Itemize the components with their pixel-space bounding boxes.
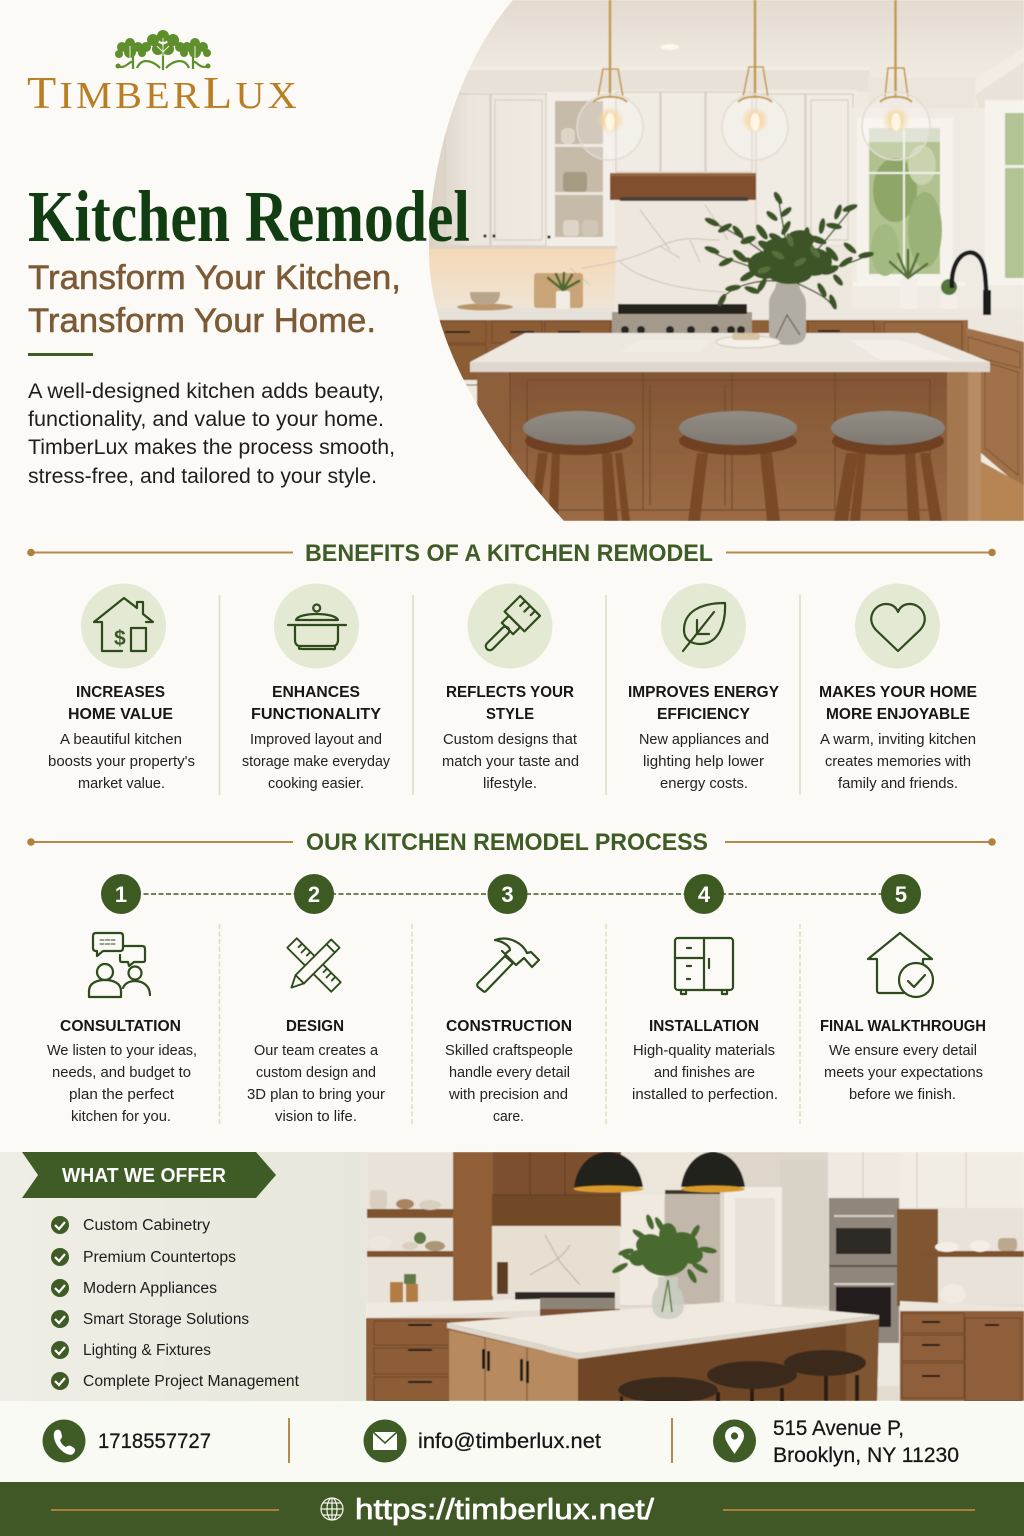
benefit text <box>628 684 779 792</box>
offer list <box>51 1216 300 1390</box>
process dividers <box>220 924 800 1125</box>
contact: email: info@timberlux.net <box>418 1430 601 1453</box>
step text: meets your expectations <box>824 1065 983 1081</box>
benefit text: creates memories with <box>825 754 971 770</box>
step: final walkthrough <box>820 933 986 1103</box>
stove <box>515 1292 615 1300</box>
contact bar <box>0 1401 1024 1482</box>
heading: process: OUR KITCHEN REMODEL PROCESS <box>306 829 708 856</box>
vase and plate <box>769 283 806 345</box>
benefit text: Improved layout and <box>250 732 382 748</box>
offer list: Modern Appliances <box>83 1280 217 1297</box>
panel: what we offer <box>0 1152 366 1401</box>
step text: FINAL WALKTHROUGH <box>820 1018 986 1035</box>
intro paragraph: TimberLux makes the process smooth, <box>28 436 395 459</box>
benefit text: storage make everyday <box>242 754 391 770</box>
step text: DESIGN <box>286 1018 344 1035</box>
benefit text <box>442 684 579 792</box>
process timeline: 5 <box>895 882 907 907</box>
contact: phone <box>42 1420 211 1462</box>
benefit text: market value. <box>78 776 165 792</box>
contact: address <box>713 1417 959 1467</box>
benefit: improves energy efficiency <box>628 584 779 792</box>
process timeline <box>101 874 921 914</box>
benefit text: MAKES YOUR HOME <box>819 684 977 701</box>
step text: needs, and budget to <box>52 1065 191 1081</box>
step text: High-quality materials <box>633 1043 775 1059</box>
black dome pendants <box>574 1152 745 1192</box>
ovens and tall cabinets <box>828 1152 900 1199</box>
step: design <box>247 938 385 1125</box>
banner heading <box>22 1152 276 1198</box>
icon: hammer <box>477 939 539 992</box>
step text: installed to perfection. <box>632 1087 778 1103</box>
left shelves <box>367 1209 464 1218</box>
contact: address: Brooklyn, NY 11230 <box>773 1444 959 1467</box>
logo wordmark: TIMBERLUX <box>27 68 300 118</box>
step text <box>632 1018 778 1103</box>
benefit text: ENHANCES <box>272 684 360 701</box>
island <box>578 1318 879 1401</box>
icon: leaf <box>661 584 746 668</box>
island <box>510 371 948 521</box>
step text <box>47 1018 197 1125</box>
step: installation <box>632 938 778 1103</box>
intro paragraph: functionality, and value to your home. <box>28 408 384 431</box>
logo: TimberLux <box>27 30 300 118</box>
process timeline: 3 <box>501 882 514 907</box>
offer list: Smart Storage Solutions <box>83 1311 249 1328</box>
website url: https://timberlux.net/ <box>355 1494 655 1526</box>
stools <box>620 1375 859 1402</box>
step text: handle every detail <box>449 1065 570 1081</box>
benefit text: energy costs. <box>660 776 748 792</box>
benefit text: A warm, inviting kitchen <box>820 732 976 748</box>
contact: email <box>364 1420 601 1462</box>
step: construction <box>445 939 573 1125</box>
contact: address: 515 Avenue P, <box>773 1417 904 1440</box>
step text: We listen to your ideas, <box>47 1043 197 1059</box>
step: consultation <box>47 933 197 1125</box>
offer list: Custom Cabinetry <box>83 1217 210 1234</box>
sill plants <box>900 278 918 309</box>
benefit text: FUNCTIONALITY <box>251 706 381 723</box>
step text: CONSULTATION <box>60 1018 181 1035</box>
subtitle <box>28 259 401 340</box>
divider <box>671 1418 673 1463</box>
step text: Our team creates a <box>254 1043 379 1059</box>
intro paragraph <box>28 380 395 488</box>
icon: globe <box>321 1498 343 1520</box>
step text <box>445 1018 573 1125</box>
benefit text: STYLE <box>486 706 534 723</box>
hood and wood column <box>492 1152 622 1228</box>
banner heading: WHAT WE OFFER <box>62 1165 227 1187</box>
step text: CONSTRUCTION <box>446 1018 572 1035</box>
heading: benefits: BENEFITS OF A KITCHEN REMODEL <box>305 540 713 567</box>
step text: INSTALLATION <box>649 1018 759 1035</box>
vase and leaves <box>652 1277 684 1319</box>
icon: house with dollar: $ <box>114 627 126 650</box>
step text: with precision and <box>448 1087 568 1103</box>
backsplash <box>492 1226 620 1296</box>
step text <box>247 1018 385 1125</box>
heading: process <box>27 829 996 856</box>
icon: cooking pot <box>274 584 359 668</box>
benefit: makes your home more enjoyable <box>819 584 977 792</box>
hood <box>610 173 756 200</box>
step text: 3D plan to bring your <box>247 1087 385 1103</box>
step text: We ensure every detail <box>829 1043 977 1059</box>
benefits dividers <box>220 595 800 795</box>
benefit text: boosts your property's <box>48 754 195 770</box>
process timeline: 4 <box>698 882 711 907</box>
icon: cabinet <box>675 938 733 994</box>
process timeline: 2 <box>308 882 320 907</box>
icon: heart <box>855 584 940 668</box>
step text: before we finish. <box>849 1087 956 1103</box>
stove <box>612 312 752 334</box>
benefit: enhances functionality <box>242 584 391 792</box>
step text: vision to life. <box>275 1109 357 1125</box>
leafy plant <box>703 190 874 311</box>
intro paragraph: A well-designed kitchen adds beauty, <box>28 380 384 403</box>
process timeline: 1 <box>115 882 127 907</box>
step text: custom design and <box>256 1065 376 1081</box>
step text: kitchen for you. <box>71 1109 171 1125</box>
offer list: Premium Countertops <box>83 1249 236 1266</box>
counters <box>425 308 615 320</box>
benefit text: REFLECTS YOUR <box>446 684 574 701</box>
icon: paint brush <box>468 584 552 668</box>
step text: plan the perfect <box>69 1087 174 1103</box>
divider <box>288 1418 290 1463</box>
left counter and drawers <box>366 1299 540 1318</box>
glass pendant lamps <box>577 0 930 160</box>
footer band <box>0 1482 1024 1536</box>
benefit text: A beautiful kitchen <box>60 732 182 748</box>
icon: house with dollar <box>81 584 166 668</box>
benefit text <box>242 684 391 792</box>
subtitle: Transform Your Home. <box>28 302 376 340</box>
benefit: reflects your style <box>442 584 579 792</box>
benefit text: match your taste and <box>442 754 579 770</box>
icon: house with check <box>868 933 933 997</box>
benefit text: New appliances and <box>639 732 769 748</box>
benefit text: family and friends. <box>838 776 958 792</box>
benefit text: cooking easier. <box>268 776 364 792</box>
benefit text: INCREASES <box>76 684 165 701</box>
hero photo: kitchen with pendants and island <box>420 0 1024 521</box>
benefit text <box>48 684 195 792</box>
heading: benefits <box>27 540 996 567</box>
offer list: Complete Project Management <box>83 1373 300 1390</box>
contact: phone: 1718557727 <box>98 1430 211 1453</box>
benefit text <box>819 684 977 792</box>
benefit: increases home value <box>48 584 195 792</box>
benefit text: lifestyle. <box>483 776 537 792</box>
step text: Skilled craftspeople <box>445 1043 573 1059</box>
benefit text: MORE ENJOYABLE <box>826 706 970 723</box>
accent rule <box>28 353 93 356</box>
benefit text: EFFICIENCY <box>657 706 750 723</box>
benefit text: HOME VALUE <box>68 706 173 723</box>
logo trees icon <box>115 30 211 70</box>
icon: pencil and ruler <box>287 938 341 992</box>
title: Kitchen Remodel: Kitchen Remodel <box>28 176 470 257</box>
benefit text: IMPROVES ENERGY <box>628 684 779 701</box>
benefit text: Custom designs that <box>443 732 577 748</box>
offer list: Lighting & Fixtures <box>83 1342 211 1359</box>
subtitle: Transform Your Kitchen, <box>28 259 401 297</box>
icon: people talking <box>89 933 150 997</box>
step text: and finishes are <box>654 1065 755 1081</box>
countertop items <box>457 304 513 310</box>
stools <box>523 411 945 521</box>
intro paragraph: stress-free, and tailored to your style. <box>28 465 377 488</box>
benefit text: lighting help lower <box>643 754 764 770</box>
step text: care. <box>493 1109 524 1125</box>
photo: kitchen with black pendants <box>366 1152 1024 1403</box>
step text <box>820 1018 986 1103</box>
